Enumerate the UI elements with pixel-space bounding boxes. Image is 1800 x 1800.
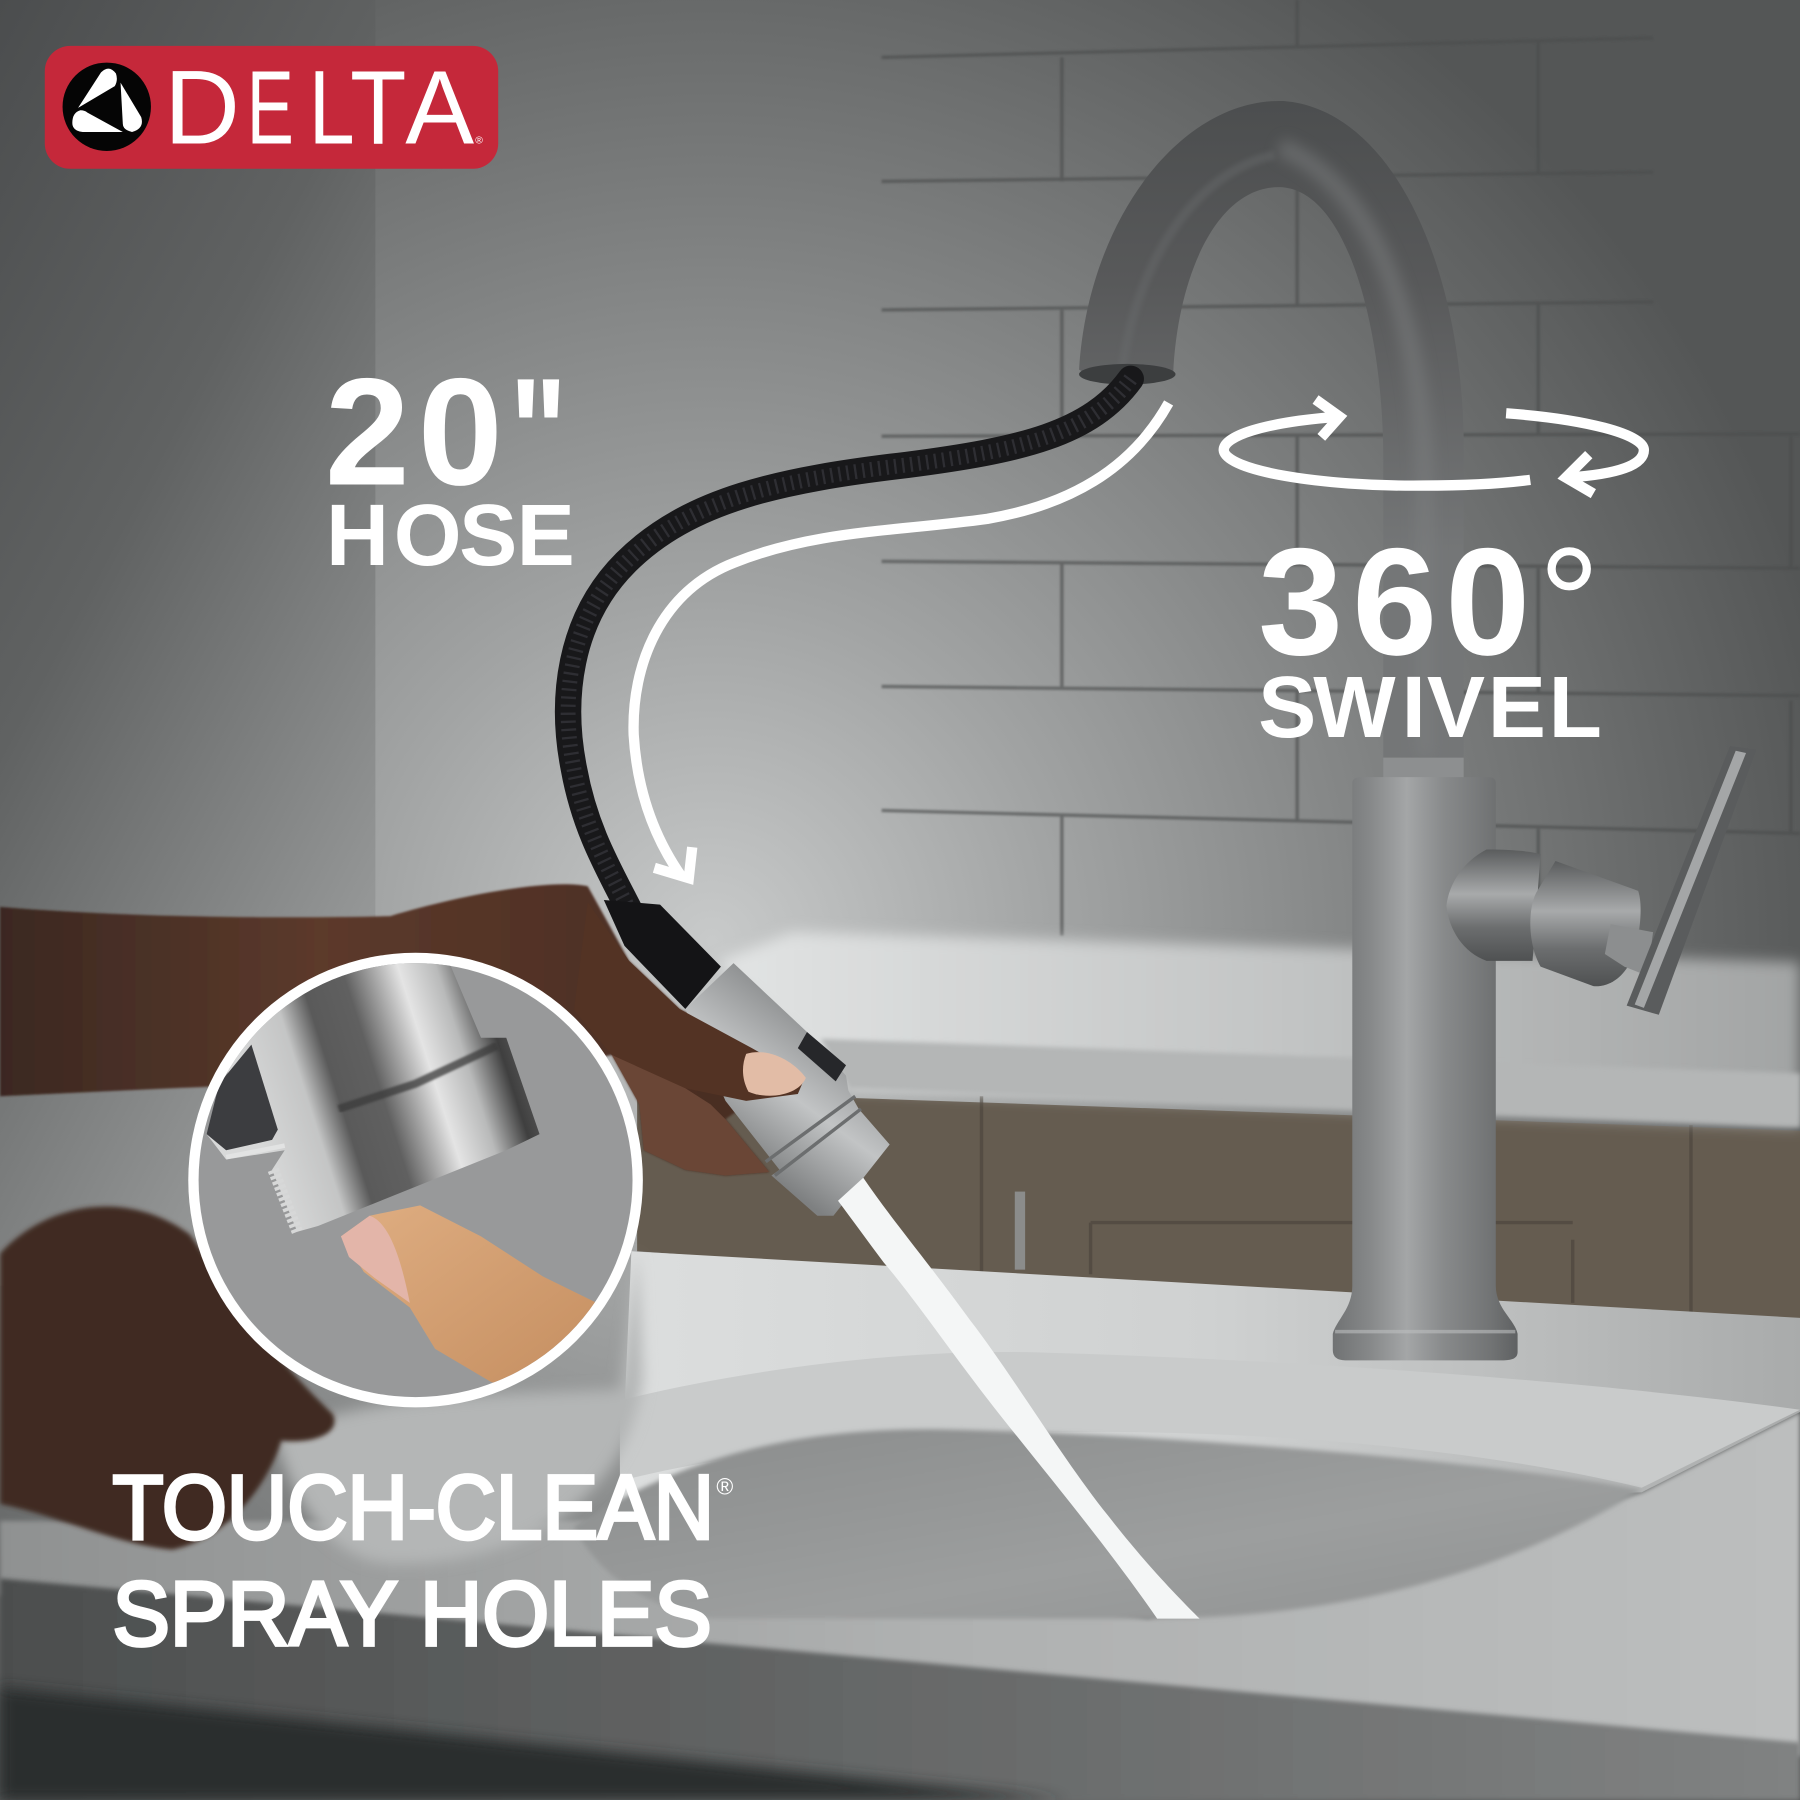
riser collar <box>1383 758 1464 783</box>
sink front edge <box>620 1352 1800 1488</box>
logo: Delta <box>45 46 498 169</box>
second hand under inset <box>0 1207 335 1550</box>
wordmark: E <box>247 49 294 166</box>
bowl behind the hand <box>276 1251 643 1564</box>
callout: Touch-Clean spray holes: ® <box>716 1474 733 1500</box>
sink and front countertop <box>0 1251 1800 1800</box>
handle hub <box>1446 746 1756 1015</box>
callout: Touch-Clean spray holes: TOUCH-CLEAN <box>113 1457 714 1558</box>
wordmark: A <box>405 49 474 166</box>
sink basin <box>574 1429 1642 1619</box>
nozzle close-up <box>207 936 540 1232</box>
callout: 360 degree swivel: SWIVEL <box>1258 659 1602 756</box>
wordmark: L <box>309 49 355 166</box>
callout: Touch-Clean spray holes <box>113 1457 733 1665</box>
icon: Delta emblem <box>63 63 151 151</box>
counter top surface <box>620 1251 1800 1515</box>
callout: 360 degree swivel: ° <box>1538 515 1600 688</box>
callout: Touch-Clean spray holes: SPRAY HOLES <box>113 1564 712 1665</box>
spout <box>1079 101 1464 758</box>
faucet <box>1079 101 1756 1360</box>
callout: 360 degree swivel <box>1258 515 1602 756</box>
logo: Delta: ® <box>475 135 483 146</box>
lower rim and front face <box>0 1412 1800 1800</box>
callout: 20 inch hose: " <box>510 347 567 517</box>
back countertop and cabinets <box>637 932 1800 1332</box>
callout: 20 inch hose: HOSE <box>326 487 575 584</box>
faucet body <box>1333 777 1518 1360</box>
callout: 20 inch hose <box>325 347 575 584</box>
finger <box>341 1205 595 1382</box>
back counter <box>717 932 1800 1127</box>
arrow: hose length <box>634 403 1169 878</box>
tile grout lines <box>882 0 1800 936</box>
forearm and back of hand holding sprayer <box>0 884 769 1176</box>
inset circle: touch-clean nozzle <box>184 936 647 1412</box>
callout: 360 degree swivel: 360 <box>1258 517 1530 687</box>
cabinets <box>637 1091 1800 1332</box>
wordmark: T <box>350 49 406 166</box>
water stream <box>838 1178 1200 1619</box>
thumb and lower fingers over sprayer <box>574 902 806 1176</box>
wordmark <box>164 49 474 166</box>
hose <box>568 379 1131 918</box>
wordmark: D <box>164 49 240 166</box>
arrow: swivel rotation <box>1224 399 1644 494</box>
pull-down sprayer head <box>604 900 890 1216</box>
callout: 20 inch hose: 20 <box>325 347 503 517</box>
